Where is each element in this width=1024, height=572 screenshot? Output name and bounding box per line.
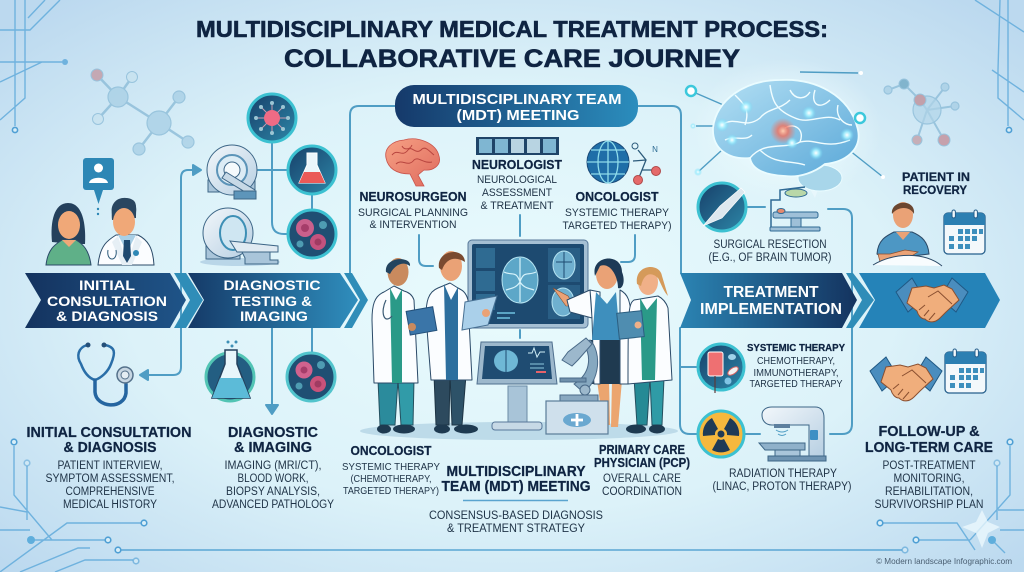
- MDT frame lines: [350, 106, 681, 338]
- icon: pink brain: [386, 139, 440, 186]
- text: neurologist: & TREATMENT: [480, 200, 554, 212]
- text: radiation therapy: (LINAC, PROTON THERAPY): [712, 481, 852, 493]
- icon: globe and molecule: N: [652, 145, 658, 154]
- chevron: diagnostic testing: [188, 273, 368, 328]
- doctor 4: [617, 267, 672, 434]
- doctor 1: [372, 258, 437, 434]
- text: radiation therapy: RADIATION THERAPY: [729, 468, 837, 480]
- icon: handshake follow-up: [870, 357, 942, 401]
- chevron: diagnostic testing: IMAGING: [240, 308, 308, 324]
- flow lines: consultation to diagnostic: [140, 165, 201, 380]
- text: neurosurgeon: & INTERVENTION: [370, 219, 457, 231]
- text: systemic therapy: TARGETED THERAPY: [750, 378, 842, 390]
- text: oncologist bottom: [342, 444, 440, 497]
- text: MDT meeting summary: [429, 463, 603, 535]
- icon: globe and molecule: [587, 141, 660, 184]
- text: surgical resection: [708, 239, 832, 264]
- text: MDT meeting summary: & TREATMENT STRATEGY: [447, 521, 585, 535]
- text: initial consultation details: & DIAGNOSIS: [64, 439, 156, 456]
- text: follow-up and long-term care: SURVIVORSHIP PLAN: [874, 499, 984, 511]
- text: patient in recovery: RECOVERY: [903, 183, 967, 197]
- text: initial consultation details: INITIAL CONSULTATION: [26, 424, 192, 441]
- icon: calendar follow-up: [945, 349, 986, 393]
- text: oncologist top: TARGETED THERAPY): [562, 220, 672, 232]
- flow lines: diagnostic tree: [258, 140, 312, 414]
- text: patient in recovery: [902, 170, 970, 197]
- circuit decoration: top left: [0, 0, 68, 133]
- chevron: initial consultation: INITIAL: [79, 277, 136, 293]
- text: oncologist bottom: SYSTEMIC THERAPY: [342, 461, 440, 473]
- text: surgical resection: (E.G., OF BRAIN TUMOR): [708, 252, 832, 264]
- text: diagnostic and imaging details: & IMAGING: [234, 439, 312, 456]
- floor shadow: [360, 422, 678, 440]
- text: initial consultation details: [26, 424, 192, 511]
- text: diagnostic and imaging details: ADVANCED PATHOLOGY: [212, 499, 334, 511]
- icon: calendar recovery: [944, 210, 985, 254]
- icon: blue flask disc: [206, 340, 254, 401]
- text: diagnostic and imaging details: [212, 424, 334, 511]
- icon: MRI scanner: [207, 145, 257, 199]
- text: follow-up and long-term care: LONG-TERM CARE: [865, 439, 993, 456]
- text: MDT meeting summary: TEAM (MDT) MEETING: [442, 478, 590, 495]
- icon: pathogens disc: [288, 210, 336, 258]
- icon: IV bag disc: [698, 344, 744, 393]
- text: systemic therapy: CHEMOTHERAPY,: [757, 355, 835, 367]
- title: COLLABORATIVE CARE JOURNEY: [284, 45, 740, 73]
- text: systemic therapy: [747, 342, 845, 390]
- chevron: initial consultation: [25, 273, 203, 328]
- main brain scan monitor: [468, 240, 588, 328]
- treatment frame lines: [680, 207, 852, 434]
- text: oncologist top: ONCOLOGIST: [576, 189, 659, 204]
- icon: pathogens disc lower: [287, 353, 335, 401]
- text: oncologist top: [562, 189, 672, 232]
- text: oncologist top: SYSTEMIC THERAPY: [565, 207, 670, 219]
- text: neurosurgeon: SURGICAL PLANNING: [358, 207, 468, 219]
- chevron: diagnostic testing: DIAGNOSTIC: [224, 277, 320, 293]
- text: primary care physician: OVERALL CARE: [603, 473, 681, 485]
- text: systemic therapy: IMMUNOTHERAPY,: [754, 367, 838, 379]
- text: diagnostic and imaging details: BLOOD WORK,: [238, 473, 308, 485]
- text: follow-up and long-term care: POST-TREATMENT: [882, 460, 976, 472]
- chevron: follow-up with handshake: [859, 273, 1000, 328]
- text: initial consultation details: MEDICAL HISTORY: [63, 499, 157, 511]
- text: neurologist: NEUROLOGICAL: [477, 174, 557, 186]
- text: neurologist: ASSESSMENT: [482, 187, 552, 199]
- icon: brain scan strip: [476, 137, 559, 155]
- text: follow-up and long-term care: [865, 423, 993, 511]
- chevron: diagnostic testing: TESTING &: [232, 293, 312, 309]
- text: diagnostic and imaging details: DIAGNOSTIC: [228, 424, 318, 441]
- small control monitor: [477, 342, 557, 430]
- text: primary care physician: PHYSICIAN (PCP): [594, 456, 690, 470]
- text: follow-up and long-term care: MONITORING,: [894, 473, 964, 485]
- text: MDT meeting summary: MULTIDISCIPLINARY: [446, 463, 586, 480]
- doctor 3: [553, 259, 632, 427]
- text: systemic therapy: SYSTEMIC THERAPY: [747, 342, 845, 354]
- circuit decoration: bottom left: [0, 439, 147, 572]
- doctor 2: [426, 251, 497, 434]
- icon: linear accelerator: [759, 407, 826, 461]
- text: neurologist: [472, 157, 562, 212]
- text: diagnostic and imaging details: BIOPSY ANALYSIS,: [226, 486, 320, 498]
- microscope and case: [546, 338, 608, 434]
- icon: surgical table: [770, 187, 820, 231]
- icon: glowing brain with network nodes: [686, 58, 885, 202]
- chevron: initial consultation: & DIAGNOSIS: [56, 308, 158, 324]
- text: primary care physician: COORDINATION: [602, 486, 682, 498]
- text: patient in recovery: PATIENT IN: [902, 170, 970, 184]
- icon: scalpel disc: [698, 183, 746, 231]
- chevron: initial consultation: CONSULTATION: [47, 293, 167, 309]
- title: MULTIDISCIPLINARY MEDICAL TREATMENT PROCESS:: [196, 16, 828, 42]
- text: oncologist bottom: ONCOLOGIST: [350, 444, 432, 458]
- copyright: © Modern landscape Infographic.com: [876, 557, 1012, 566]
- text: neurosurgeon: NEUROSURGEON: [360, 189, 466, 204]
- icon: red flask disc: [288, 146, 336, 194]
- chevron: treatment implementation: TREATMENT: [724, 284, 819, 301]
- icon: patient in bed: [873, 202, 942, 266]
- text: neurologist: NEUROLOGIST: [472, 157, 562, 172]
- icon: cell disc: [248, 94, 296, 142]
- text: neurosurgeon: [358, 189, 468, 231]
- icon: radiation disc: [698, 411, 744, 457]
- text: surgical resection: SURGICAL RESECTION: [714, 239, 826, 251]
- icon: stethoscope: [78, 342, 133, 405]
- text: radiation therapy: [712, 468, 852, 493]
- text: initial consultation details: SYMPTOM ASSESSMENT,: [46, 473, 174, 485]
- MDT heading pill: [395, 85, 638, 127]
- chevron: treatment implementation: [680, 273, 874, 328]
- title: [196, 16, 828, 73]
- circuit decoration: bottom right: [877, 439, 1024, 553]
- text: follow-up and long-term care: REHABILITATION,: [885, 486, 973, 498]
- chevron: treatment implementation: IMPLEMENTATION: [700, 301, 842, 318]
- MDT heading pill: MULTIDISCIPLINARY TEAM: [412, 91, 622, 108]
- text: oncologist bottom: (CHEMOTHERAPY,: [350, 473, 432, 485]
- text: primary care physician: PRIMARY CARE: [599, 443, 685, 457]
- circuit decoration: top right: [975, 0, 1024, 133]
- molecule left: [91, 69, 194, 155]
- text: initial consultation details: COMPREHENSIVE: [66, 486, 155, 498]
- text: oncologist bottom: TARGETED THERAPY): [343, 485, 439, 497]
- molecule right: [884, 79, 959, 146]
- timeline base line: [115, 547, 908, 553]
- text: follow-up and long-term care: FOLLOW-UP &: [878, 423, 980, 440]
- text: initial consultation details: PATIENT INTERVIEW,: [58, 460, 162, 472]
- text: primary care physician: [594, 443, 690, 498]
- icon: CT scanner: [200, 208, 280, 266]
- MDT heading pill: (MDT) MEETING: [456, 107, 580, 124]
- text: MDT meeting summary: CONSENSUS-BASED DIAGNOSIS: [429, 508, 603, 522]
- text: diagnostic and imaging details: IMAGING (MRI/CT),: [224, 460, 322, 472]
- icon: patient and doctor consultation: [46, 158, 154, 265]
